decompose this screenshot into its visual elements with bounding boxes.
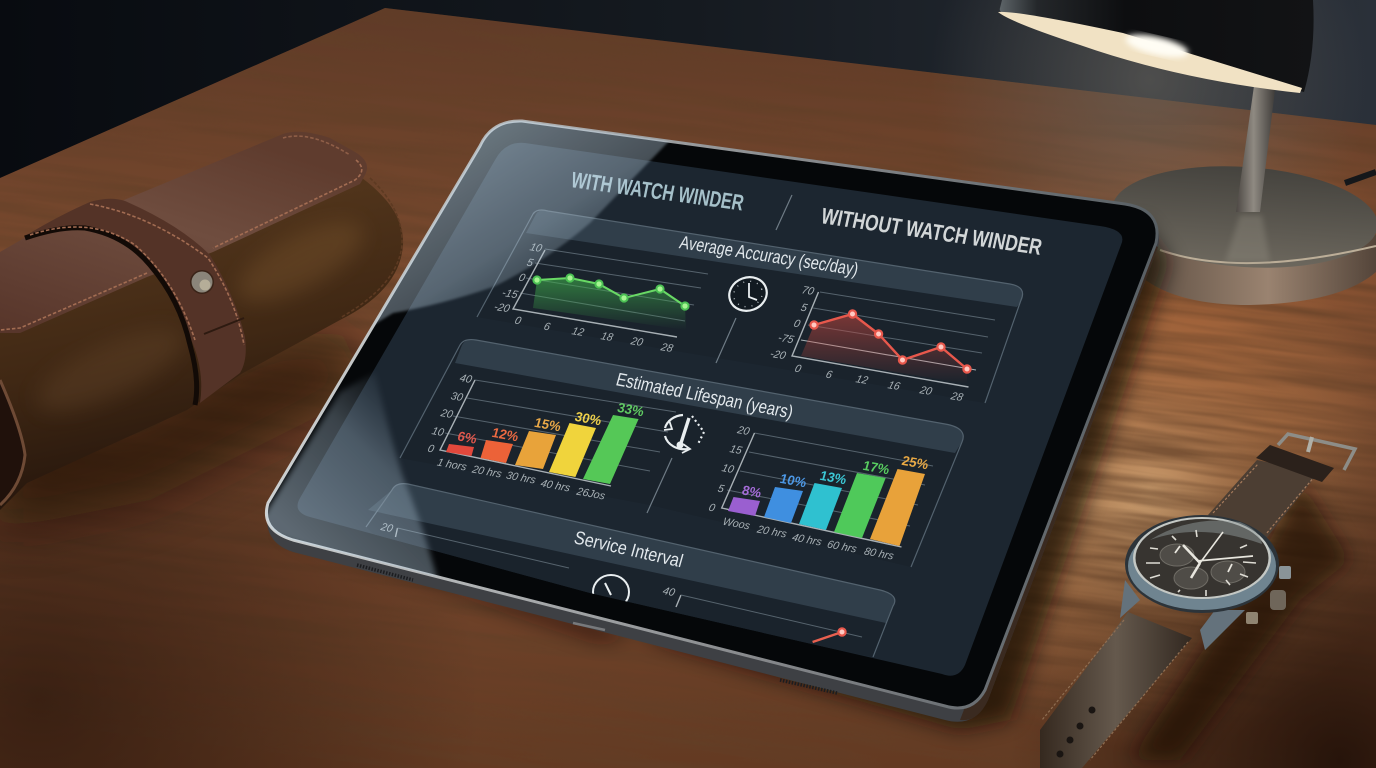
screen content xyxy=(366,167,1044,657)
bar chart: with winder: 40 xyxy=(458,372,473,386)
tablet xyxy=(255,115,1159,722)
bar chart: with winder: 30 hrs xyxy=(505,470,538,487)
panel header band xyxy=(455,340,963,453)
bar chart: with winder xyxy=(426,372,676,503)
heading: with watch winder: WITH WATCH WINDER xyxy=(569,167,746,215)
line chart: without winder: 5 xyxy=(799,302,810,315)
leather watch roll xyxy=(0,132,403,530)
roll flap xyxy=(0,132,367,333)
line chart: with winder: -15 xyxy=(501,287,520,301)
line chart: without winder: 6 xyxy=(824,369,834,381)
case xyxy=(1125,515,1279,613)
bar chart: without winder: Woos xyxy=(721,516,752,532)
line chart: with winder: 20 xyxy=(628,335,644,349)
bar chart: with winder: 20 xyxy=(438,407,454,421)
lamp wire xyxy=(1345,172,1376,183)
lamp shade xyxy=(1000,0,1314,92)
bar chart: without winder: 60 hrs xyxy=(826,539,859,556)
bar chart: with winder: 20 hrs xyxy=(470,463,504,481)
reflection: lower glare xyxy=(266,376,440,576)
line chart: with winder: 0 xyxy=(517,272,527,284)
line chart: with winder: -20 xyxy=(493,301,511,315)
bar chart: with winder: 33% xyxy=(616,400,646,419)
bar chart: without winder: 20 xyxy=(735,424,751,438)
bar chart: without winder: 13% xyxy=(818,468,848,487)
line chart: without winder: 20 xyxy=(917,384,933,398)
tablet bezel xyxy=(266,121,1157,708)
line chart: with winder xyxy=(493,241,708,355)
glass reflections xyxy=(255,115,672,590)
panel title: Average Accuracy (sec/day) xyxy=(678,231,861,280)
USB port xyxy=(573,623,605,630)
bar chart: with winder: 40 hrs xyxy=(539,478,572,495)
snap button xyxy=(190,270,214,294)
lugs xyxy=(1120,580,1245,650)
icon: clock cropped xyxy=(592,574,630,602)
dial xyxy=(1136,519,1268,597)
bar chart: with winder: 1 hors xyxy=(436,457,469,474)
roll body xyxy=(0,178,403,510)
watch hands xyxy=(1175,532,1253,578)
line chart: with winder: 6 xyxy=(542,321,552,333)
icon: clock xyxy=(728,276,768,312)
bar chart: with winder: 15% xyxy=(533,415,563,434)
heading: without watch winder: WITHOUT WATCH WINDER xyxy=(819,203,1044,260)
roll strap xyxy=(25,199,246,403)
speaker grille left xyxy=(357,565,413,580)
buckle xyxy=(1278,434,1355,470)
speaker grille right xyxy=(780,680,837,693)
bar chart: without winder: 20 hrs xyxy=(755,523,789,541)
panel: estimated lifespan xyxy=(400,340,963,567)
chart stub: without winder xyxy=(661,585,862,642)
lamp base xyxy=(1109,158,1376,305)
icon: gauge with circular arrows xyxy=(664,415,704,453)
panel: service interval xyxy=(366,484,895,657)
line chart: without winder xyxy=(769,284,995,404)
bar chart: without winder: 25% xyxy=(900,453,930,472)
tablet side wall xyxy=(267,125,1159,722)
line chart: with winder: 10 xyxy=(528,241,543,255)
bar chart: without winder: 15 xyxy=(728,443,744,457)
bar chart: without winder: 8% xyxy=(740,483,763,501)
bar chart: with winder: 0 xyxy=(426,443,435,455)
panel header band xyxy=(368,484,895,623)
strap keeper xyxy=(1256,445,1334,482)
panel title: Estimated Lifespan (years) xyxy=(614,368,796,422)
chart stub: with winder: 20 xyxy=(378,521,394,535)
bar chart: with winder: 6% xyxy=(456,429,479,447)
line chart: with winder: 12 xyxy=(570,325,585,339)
watch indices xyxy=(1146,530,1256,596)
line chart: without winder: 70 xyxy=(800,284,815,298)
bar chart: without winder: 17% xyxy=(861,458,891,477)
bar chart: without winder xyxy=(707,424,933,563)
line chart: with winder: 28 xyxy=(658,341,674,355)
bar chart: without winder: 0 xyxy=(707,502,716,514)
line chart: without winder: -20 xyxy=(769,348,787,362)
strap holes xyxy=(1056,706,1096,758)
lamp light glow xyxy=(998,12,1302,93)
line chart: without winder: 12 xyxy=(854,373,869,387)
lamp stem xyxy=(1236,86,1275,212)
crown and pushers xyxy=(1246,566,1291,624)
line chart: with winder: 0 xyxy=(513,315,523,327)
bar chart: with winder: 30% xyxy=(573,409,603,428)
chart stub: with winder xyxy=(378,521,569,568)
line chart: without winder: 28 xyxy=(948,390,964,404)
panel title: Service Interval xyxy=(572,527,686,571)
line chart: without winder: 0 xyxy=(792,318,802,330)
lower strap xyxy=(1040,612,1192,768)
tablet screen xyxy=(298,143,1122,676)
bar chart: with winder: 12% xyxy=(490,425,520,444)
roll end xyxy=(0,380,25,505)
reflection: upper glare xyxy=(375,121,669,326)
panel header band xyxy=(526,210,1023,307)
wristwatch xyxy=(1040,434,1355,768)
upper strap xyxy=(1208,460,1318,540)
bar chart: with winder: 10 xyxy=(430,425,445,439)
wall background xyxy=(0,0,1376,200)
bar chart: with winder: 30 xyxy=(449,390,464,404)
line chart: without winder: 16 xyxy=(886,379,901,393)
bar chart: without winder: 40 hrs xyxy=(791,532,824,549)
bar chart: without winder: 5 xyxy=(716,483,726,496)
line chart: without winder: 0 xyxy=(793,363,803,375)
chart stub: without winder: 40 xyxy=(661,585,676,599)
panel: average accuracy xyxy=(477,210,1023,404)
line chart: with winder: 18 xyxy=(599,330,614,344)
line chart: with winder: 5 xyxy=(525,257,536,270)
desk lamp xyxy=(998,0,1376,305)
bar chart: with winder: 26Jos xyxy=(574,486,607,503)
bar chart: without winder: 10% xyxy=(778,471,808,490)
bar chart: without winder: 10 xyxy=(720,462,735,476)
column dividers xyxy=(647,195,792,513)
tablet shadow xyxy=(268,220,1170,730)
line chart: without winder: -75 xyxy=(777,332,796,346)
bar chart: without winder: 80 hrs xyxy=(863,546,896,563)
